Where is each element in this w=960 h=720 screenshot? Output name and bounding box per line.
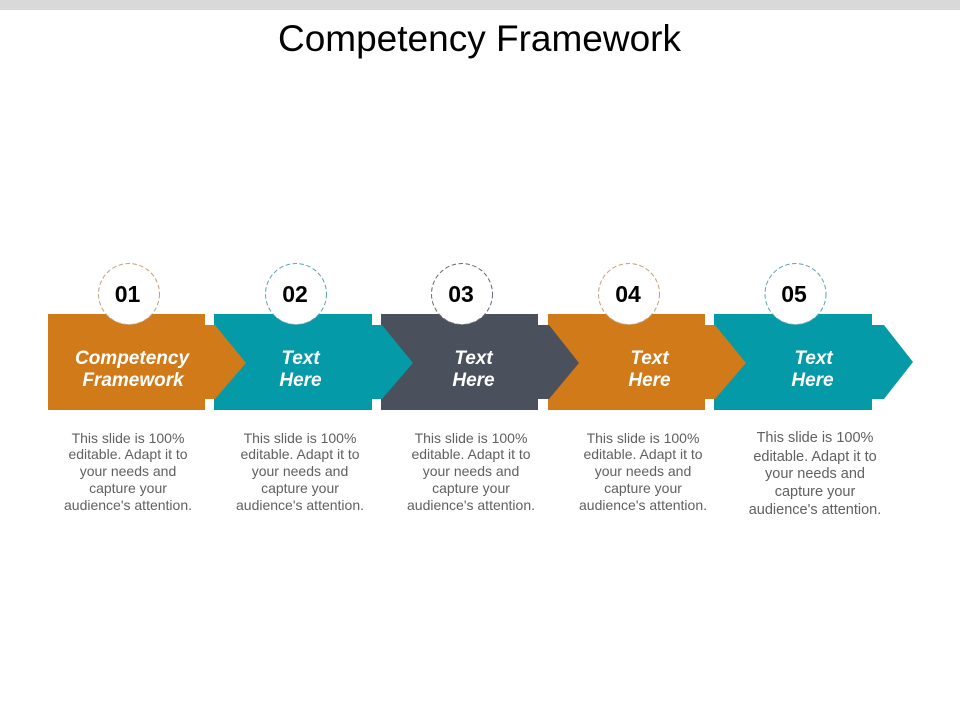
description 2: This slide is 100% [244,430,356,446]
label 4: Here [628,370,671,391]
description 3: This slide is 100% [415,430,527,446]
label 1: Competency [75,348,190,369]
label 4: Text [630,348,669,369]
description 1: your needs and [80,463,176,479]
label 5: Text [794,348,833,369]
step 5 badge [765,264,826,324]
step 4 badge: 04 [615,281,641,307]
description 4: This slide is 100% [587,430,699,446]
arrow 1 [48,314,246,410]
arrow 4 [548,314,746,410]
step 1 badge: 01 [115,281,140,307]
description 5: audience's attention. [749,502,881,518]
description 1: audience's attention. [64,497,192,513]
top band [0,0,960,10]
step 5 badge: 05 [781,281,807,307]
title: Competency Framework [278,18,681,59]
description 4: your needs and [595,463,691,479]
description 1: capture your [89,480,167,496]
description 3: capture your [432,480,510,496]
step 1 badge [98,264,160,324]
step 3 badge: 03 [448,281,474,307]
description 2: your needs and [252,463,348,479]
label 2: Text [281,348,320,369]
label 1: Framework [82,370,185,391]
description 1: editable. Adapt it to [68,446,188,462]
description 2: audience's attention. [236,497,364,513]
step 2 badge [266,264,326,324]
description 2: capture your [261,480,339,496]
description 3: your needs and [423,463,519,479]
description 3: audience's attention. [407,497,535,513]
description 4: editable. Adapt it to [583,446,703,462]
description 1: This slide is 100% [72,430,184,446]
arrow 5 [714,314,913,410]
step 4 badge [598,264,660,324]
arrow 2 [214,314,413,410]
description 5: capture your [775,484,855,500]
description 4: audience's attention. [579,497,707,513]
label 5: Here [791,370,834,391]
description 2: editable. Adapt it to [240,446,360,462]
label 3: Here [452,370,495,391]
description 5: This slide is 100% [757,430,874,446]
description 3: editable. Adapt it to [411,446,531,462]
label 2: Here [279,370,322,391]
description 5: editable. Adapt it to [753,449,877,465]
description 5: your needs and [765,466,865,482]
description 4: capture your [604,480,682,496]
step 2 badge: 02 [282,281,308,307]
arrow 3 [381,314,579,410]
step 3 badge [432,264,492,324]
label 3: Text [454,348,493,369]
